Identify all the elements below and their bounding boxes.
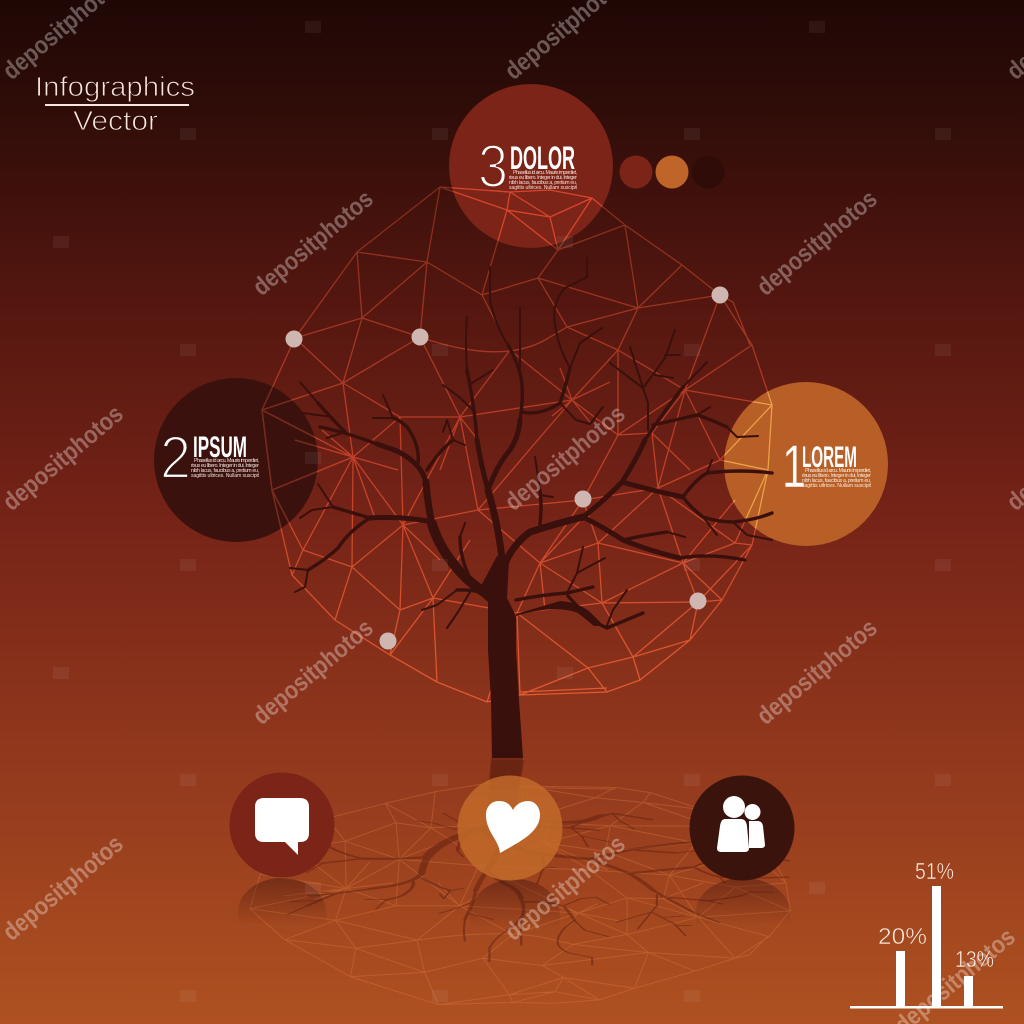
text block: 3 dolor: 3 [478,133,508,200]
text block: 2 ipsum: Phasellus id arcu. Mauris imperdiet, [194,458,259,464]
root reflection of mesh [250,783,790,1005]
text block: 1 lorem [782,433,872,500]
mesh inside circle 2 [262,386,318,529]
icon: chat bubble [230,772,334,878]
title: Vector [73,105,158,136]
circle: 2 ipsum base [154,378,318,542]
icon: heart [458,776,562,880]
text block: 2 ipsum: nibh lacus, faucibus a, pretium eu, [191,468,259,474]
circle: 1 lorem base [724,382,888,546]
title [35,71,195,136]
watermark text: depositphotos [247,614,379,730]
text block: 2 ipsum: IPSUM [193,431,247,464]
trunk reflection [488,758,523,790]
bar chart: 20% [878,923,927,949]
mesh inside circle 3 [452,187,602,246]
shadow: heart reflection [470,879,560,928]
text block: 1 lorem: sagittis ultrices. Nullam suscipit [802,483,872,489]
text block: 2 ipsum: 2 [160,424,191,491]
bar chart: 51% [915,858,954,884]
watermark text: depositphotos [499,830,631,946]
circle: 3 dolor base [449,84,613,248]
text block: 2 ipsum: risus eu libero. Integer in dui. Integer [191,463,259,469]
watermark text: depositphotos [751,185,883,301]
node dots [286,286,728,650]
text block: 2 ipsum [160,424,260,491]
pagination dots [620,156,724,188]
tree [290,258,772,758]
text block: 1 lorem: nibh lacus, faucibus a, pretium eu, [802,478,871,484]
text block: 3 dolor: sagittis ultrices. Nullam suscipit [509,185,578,191]
tree root reflection [277,760,788,965]
text block: 3 dolor: nibh lacus, faucibus a, pretium eu, [509,180,577,186]
bar chart: 13% [955,946,994,972]
text block: 3 dolor: Phasellus id arcu. Mauris imperdiet, [513,170,577,176]
polygon mesh sphere [262,187,772,702]
text block: 3 dolor: risus eu libero. Integer in dui. Integer [509,175,577,181]
text block: 1 lorem: 1 [782,433,806,500]
title: Infographics [35,71,195,102]
shadow: people reflection [696,878,790,925]
watermark text: depositphotos [751,614,883,730]
icon: people [690,776,794,880]
shadow: chat bubble reflection [238,878,326,925]
watermark text: depositphotos [247,185,379,301]
text block: 3 dolor: DOLOR [510,140,575,176]
mesh inside circle 1 [724,391,773,529]
text block: 1 lorem: risus eu libero. Integer in dui. Integer [802,473,871,479]
text block: 1 lorem: Phasellus id arcu. Mauris imperdiet, [805,468,871,474]
watermark text: depositphotos [499,400,631,516]
text block: 1 lorem: LOREM [802,441,857,474]
bar chart [850,858,1003,1008]
text block: 3 dolor [478,133,578,200]
watermark text: depositphotos [0,400,129,516]
text block: 2 ipsum: sagittis ultrices. Nullam suscipit [191,473,260,479]
watermark text: depositphotos [0,830,129,946]
